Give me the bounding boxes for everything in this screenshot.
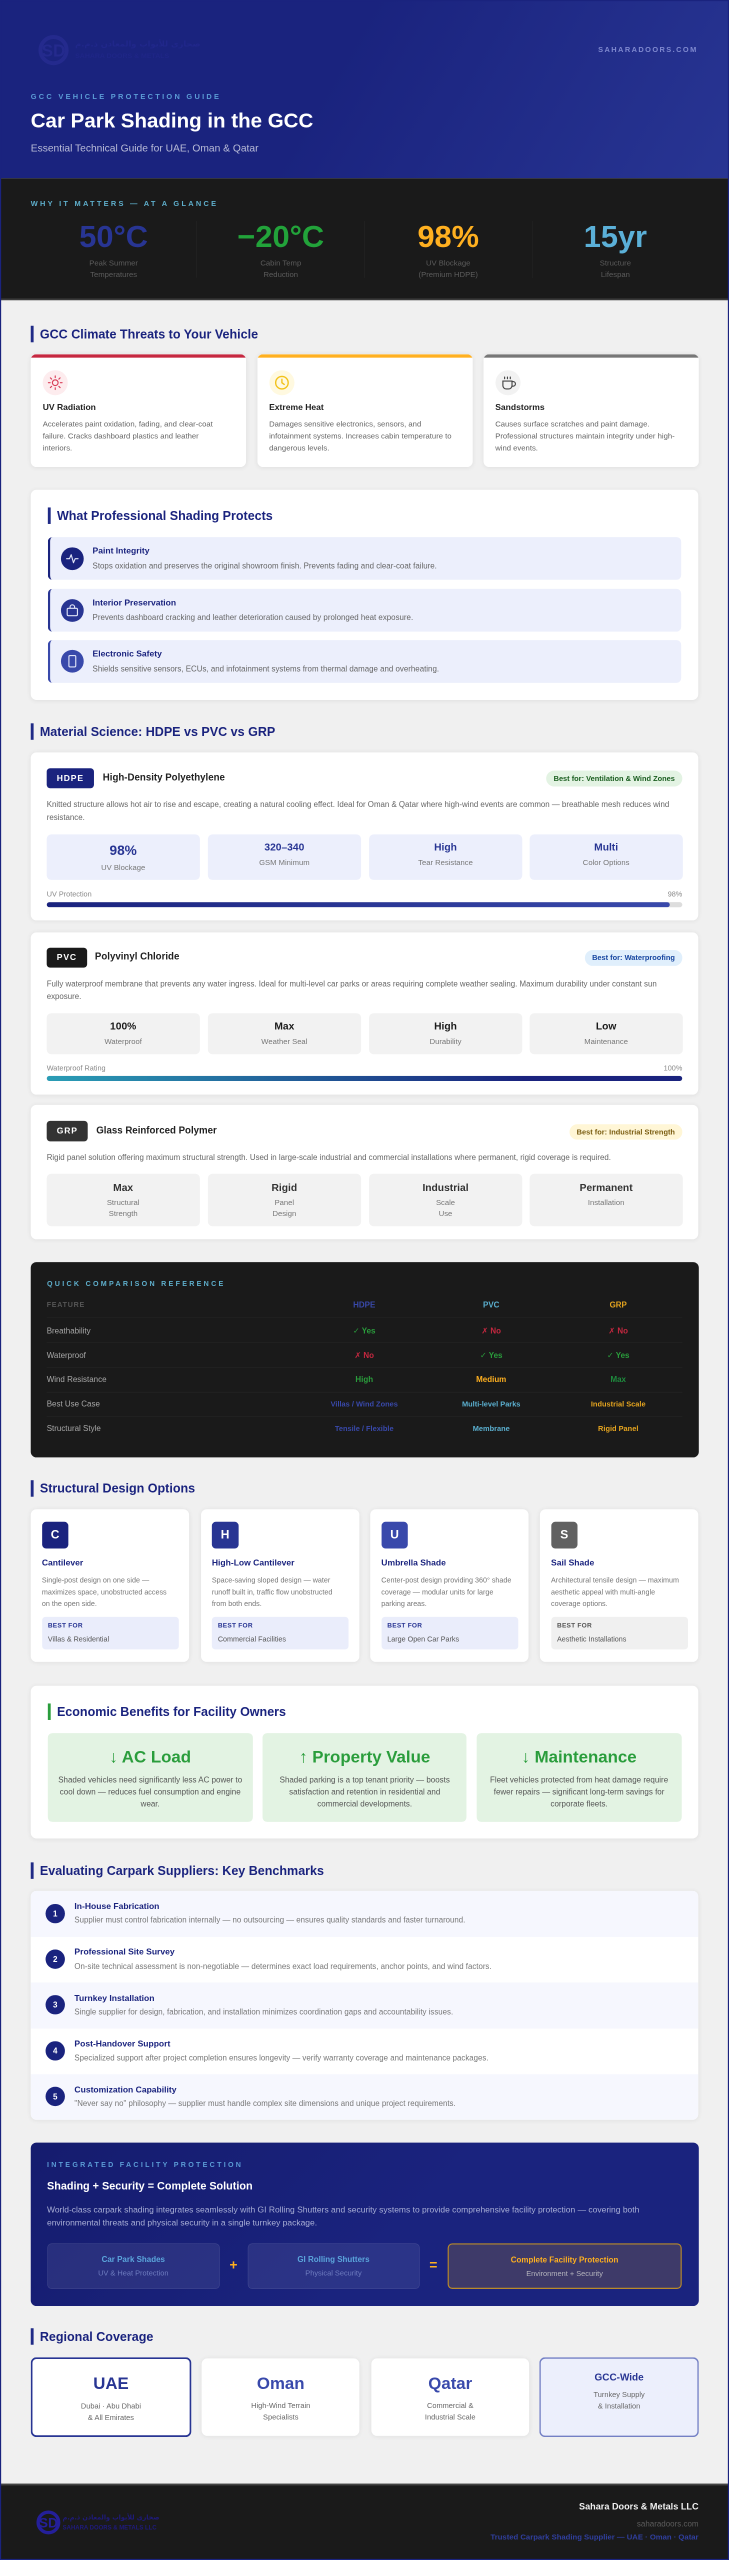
spec tile: scale — [369, 1174, 522, 1226]
structure card: umbrella shade: Center-post design providing 360° shade — [381, 1577, 511, 1585]
region card: Oman — [202, 2358, 360, 2436]
benefit: AC load — [48, 1733, 253, 1822]
structure card: umbrella shade: coverage — modular units for large — [381, 1588, 493, 1596]
badge: HDPE — [47, 768, 94, 788]
row: best use case — [47, 1392, 682, 1417]
spec tile: structural strength: Strength — [109, 1209, 138, 1218]
pill: best for — [569, 1124, 682, 1139]
spec tile: tear resistance: High — [434, 841, 457, 853]
item: electronic safety — [48, 640, 681, 683]
region card: UAE: UAE — [93, 2374, 129, 2393]
plus sign: + — [230, 2258, 237, 2273]
spec tile: weather seal: Max — [274, 1021, 294, 1032]
equation box: car park shades: UV & Heat Protection — [98, 2268, 168, 2277]
best for — [381, 1617, 518, 1649]
footer — [0, 2483, 729, 2560]
pill: best for: Best for: Ventilation & Wind Zones — [554, 774, 675, 782]
spec tile: UV blockage — [47, 834, 200, 880]
badge: PVC: PVC — [57, 953, 77, 962]
stat: UV blockage: 98% — [417, 220, 479, 254]
stat: peak temperature: Temperatures — [90, 270, 137, 279]
row: wind resistance: Wind Resistance — [47, 1375, 107, 1384]
spec tile: maintenance: Low — [596, 1021, 616, 1032]
spec tile: maintenance: Maintenance — [584, 1037, 628, 1046]
row: wind resistance: Medium — [476, 1375, 506, 1384]
region card: Qatar — [371, 2358, 529, 2436]
threat card: UV radiation: Accelerates paint oxidation, fading, and clear-coat — [43, 420, 213, 428]
material card: HDPE: High-Density Polyethylene — [103, 772, 225, 783]
structure card: high-low cantilever — [201, 1509, 359, 1662]
row: waterproof: Waterproof — [47, 1351, 86, 1360]
benefit: property value: satisfaction and retention in residential and — [289, 1787, 440, 1796]
icon: clock — [269, 370, 294, 395]
benefit: maintenance: ↓ Maintenance — [521, 1748, 637, 1767]
logo: Sahara Doors footer — [36, 2510, 160, 2534]
structure card: umbrella shade: parking areas. — [381, 1600, 427, 1608]
logo: Sahara Doors footer: SAHARA DOORS & METALS LLC — [63, 2524, 157, 2531]
benchmark 5: "Never say no" philosophy — supplier must handle complex site dimensions and unique project requirements. — [74, 2099, 456, 2108]
panel heading: Economic Benefits for Facility Owners — [57, 1704, 286, 1719]
region card: GCC-wide — [540, 2358, 699, 2437]
spec tile: scale: Use — [439, 1209, 452, 1218]
structure card: sail shade: coverage options. — [551, 1600, 608, 1608]
panel description — [47, 2206, 639, 2228]
structure card: umbrella shade: Umbrella Shade — [381, 1558, 446, 1568]
equation box: car park shades — [47, 2243, 220, 2289]
website label: SAHARADOORS.COM — [598, 45, 698, 54]
benchmark 2: On-site technical assessment is non-negotiable — determines exact load requirements, anchor points, and wind factors. — [74, 1962, 492, 1970]
row: best use case: Industrial Scale — [591, 1400, 646, 1409]
table header row: GRP — [610, 1300, 627, 1310]
best for: BEST FOR — [557, 1623, 592, 1629]
row: breathability: ✗ No — [608, 1326, 628, 1335]
row: structural style — [47, 1424, 638, 1433]
spec tile: panel design: Rigid — [272, 1182, 297, 1193]
spec tile: weather seal: Weather Seal — [261, 1037, 307, 1046]
row: best use case: Villas / Wind Zones — [331, 1400, 398, 1409]
equation box: complete protection: Complete Facility Protection — [511, 2255, 618, 2264]
logo: Sahara Doors faint: SAHARA DOORS & METALS — [75, 53, 170, 60]
region card: Oman: Specialists — [263, 2412, 298, 2421]
benchmark 1 — [31, 1891, 698, 1937]
stat: peak temperature: 50°C — [79, 220, 148, 254]
badge: GRP: GRP — [57, 1126, 78, 1136]
panel description: environmental threats and physical security in a single turnkey package. — [47, 2219, 317, 2228]
threat card: extreme heat: dangerous levels. — [269, 444, 329, 452]
structure card: cantilever: Single-post design on one side — — [42, 1577, 149, 1585]
spec tile: maintenance — [530, 1013, 683, 1054]
structure card: sail shade: aesthetic appeal with multi-angle — [551, 1588, 655, 1596]
equation box: car park shades: Car Park Shades — [102, 2255, 165, 2264]
threat card: sandstorms — [483, 354, 699, 467]
row: best use case: Best Use Case — [47, 1400, 100, 1409]
heading: regional coverage: Regional Coverage — [40, 2329, 153, 2344]
best for: Large Open Car Parks — [387, 1635, 459, 1643]
benchmark 1: Supplier must control fabrication internally — no outsourcing — ensures quality standards and faster turnaround. — [74, 1916, 465, 1925]
benchmark 2 — [31, 1937, 698, 1983]
region card: Qatar: Commercial & — [427, 2401, 473, 2410]
pill: best for — [546, 770, 682, 786]
material card: HDPE — [31, 752, 698, 920]
stat: peak temperature: Peak Summer — [89, 259, 138, 267]
stat: cabin temperature: Reduction — [263, 270, 298, 279]
region card: UAE: & All Emirates — [88, 2413, 134, 2421]
stat: UV blockage: (Premium HDPE) — [419, 270, 478, 279]
spec tile: durability — [369, 1013, 522, 1054]
benefit: AC load: Shaded vehicles need significantly less AC power to — [58, 1775, 242, 1784]
icon: activity — [61, 547, 83, 570]
item: paint integrity — [48, 537, 681, 580]
benefit: AC load: cool down — reduces fuel consumption and engine — [60, 1787, 241, 1796]
logo: Sahara Doors footer: صحارى للأبواب والمعادن ذ.م.م — [63, 2512, 160, 2521]
company name: Sahara Doors & Metals LLC — [579, 2502, 699, 2511]
heading: material science: Material Science: HDPE vs PVC vs GRP — [40, 724, 275, 739]
structure card: cantilever: maximizes space, unobstructed access — [42, 1588, 167, 1596]
stat: peak temperature — [79, 220, 148, 279]
table header row — [47, 1293, 682, 1318]
region card: UAE — [31, 2358, 191, 2437]
item: interior preservation: Interior Preservation — [93, 598, 176, 608]
badge: HDPE: HDPE — [57, 773, 84, 783]
item: interior preservation: Prevents dashboard cracking and leather deterioration caused by prolonged heat exposure. — [93, 613, 413, 622]
item: paint integrity: Paint Integrity — [93, 546, 150, 556]
heading: supplier benchmarks: Evaluating Carpark Suppliers: Key Benchmarks — [40, 1863, 324, 1878]
stat: cabin temperature: −20°C — [237, 220, 324, 254]
threat card: extreme heat: Extreme Heat — [269, 403, 324, 412]
spec tile: colours: Color Options — [583, 858, 629, 867]
badge: S: S — [560, 1528, 568, 1541]
stat: lifespan: Structure — [600, 259, 631, 267]
benefit: AC load: wear. — [141, 1799, 160, 1808]
spec tile: scale: Industrial — [422, 1182, 469, 1193]
best for: Villas & Residential — [48, 1635, 109, 1643]
material card: GRP — [31, 1105, 698, 1239]
subtitle: Essential Technical Guide for UAE, Oman & Qatar — [31, 142, 258, 154]
structure card: high-low cantilever: Space-saving sloped design — water — [212, 1577, 330, 1585]
stats band — [0, 178, 729, 300]
panel heading: What Professional Shading Protects — [57, 508, 273, 523]
spec tile: panel design: Design — [272, 1209, 296, 1218]
equation box: complete protection: Environment + Security — [526, 2269, 603, 2278]
spec tile: weather seal — [208, 1013, 361, 1054]
row: structural style: Tensile / Flexible — [335, 1424, 394, 1433]
benchmark 1: In-House Fabrication — [74, 1902, 159, 1911]
region card: Oman: High-Wind Terrain — [251, 2401, 310, 2410]
row: waterproof: ✗ No — [354, 1351, 374, 1360]
spec tile: installation: Permanent — [580, 1182, 633, 1193]
panel: supplier benchmarks — [31, 1891, 698, 2120]
spec tile: panel design: Panel — [275, 1198, 294, 1207]
benchmark 4 — [31, 2028, 698, 2074]
material card: HDPE: 98% — [668, 890, 682, 898]
threat card: sandstorms: Professional structures maintain integrity under high- — [495, 432, 675, 440]
row: wind resistance: High — [355, 1375, 373, 1384]
badge: GRP — [47, 1121, 88, 1141]
threat card: UV radiation — [31, 354, 246, 467]
region card: UAE: Dubai · Abu Dhabi — [81, 2402, 141, 2410]
benefit: AC load: ↓ AC Load — [109, 1748, 191, 1767]
row: waterproof — [47, 1343, 682, 1368]
material card: HDPE: resistance. — [47, 812, 85, 822]
threat card: sandstorms: wind events. — [495, 444, 538, 452]
structure card: umbrella shade — [370, 1509, 529, 1662]
benchmark 5: 5 — [53, 2092, 57, 2101]
structure card: high-low cantilever: runoff built in, traffic flow unobstructed — [212, 1588, 332, 1596]
spec tile: GSM: GSM Minimum — [259, 858, 310, 867]
spec tile: colours: Multi — [594, 841, 618, 853]
panel: comparison table — [31, 1262, 699, 1457]
badge: U: U — [390, 1528, 399, 1541]
structure card: cantilever: on the open side. — [42, 1600, 97, 1608]
badge: H — [212, 1522, 238, 1549]
benchmark 2: Professional Site Survey — [74, 1947, 175, 1957]
item: paint integrity: Stops oxidation and preserves the original showroom finish. Prevents fading and clear-coat failure. — [93, 561, 437, 570]
stat: cabin temperature: Cabin Temp — [260, 259, 301, 267]
badge: S — [551, 1522, 578, 1549]
best for — [212, 1617, 349, 1649]
spec tile: structural strength — [47, 1174, 200, 1226]
benchmark 3: Single supplier for design, fabrication, and installation minimizes coordination gaps and accountability issues. — [74, 2008, 453, 2016]
region card: GCC-wide: Turnkey Supply — [594, 2390, 645, 2399]
best for: Commercial Facilities — [218, 1635, 286, 1643]
badge: PVC — [47, 947, 87, 968]
benefit: property value: Shaded parking is a top tenant priority — boosts — [280, 1775, 450, 1784]
structure card: sail shade: Architectural tensile design — maximum — [551, 1577, 679, 1585]
benefit: maintenance: corporate fleets. — [550, 1799, 608, 1808]
material card: PVC: exposure. — [47, 992, 81, 1001]
spec tile: installation — [530, 1174, 683, 1226]
panel title: Shading + Security = Complete Solution — [47, 2180, 253, 2192]
threat card: UV radiation: interiors. — [43, 444, 72, 452]
spec tile: installation: Installation — [588, 1198, 624, 1207]
badge: C — [42, 1522, 68, 1549]
structure card: high-low cantilever: from both ends. — [212, 1600, 262, 1608]
material card: PVC: Polyvinyl Chloride — [95, 951, 179, 962]
threat card: sandstorms: Sandstorms — [495, 403, 545, 412]
table header row: PVC — [483, 1300, 499, 1310]
equation box: rolling shutters — [247, 2243, 419, 2289]
progress bar: UV protection — [47, 902, 682, 907]
item: electronic safety: Shields sensitive sensors, ECUs, and infotainment systems from thermal damage and overheating. — [93, 664, 439, 673]
spec tile: scale: Scale — [436, 1198, 455, 1207]
item: interior preservation — [48, 589, 681, 632]
row: breathability: ✗ No — [481, 1326, 501, 1335]
equation box: complete protection — [447, 2243, 682, 2289]
best for: BEST FOR — [48, 1623, 83, 1629]
spec tile: GSM — [208, 834, 361, 880]
best for: BEST FOR — [218, 1623, 253, 1629]
row: wind resistance: Max — [610, 1375, 626, 1384]
spec tile: durability: Durability — [430, 1037, 461, 1046]
tagline: Trusted Carpark Shading Supplier — UAE · Oman · Qatar — [490, 2532, 699, 2541]
threat card: UV radiation: failure. Cracks dashboard plastics and leather — [43, 432, 199, 440]
benchmark 3 — [31, 1983, 698, 2028]
logo: Sahara Doors faint: SD — [42, 41, 65, 60]
region card: GCC-wide: GCC-Wide — [595, 2372, 644, 2383]
eyebrow: INTEGRATED FACILITY PROTECTION — [47, 2161, 243, 2169]
table heading: QUICK COMPARISON REFERENCE — [47, 1279, 226, 1287]
panel: what shading protects — [31, 490, 698, 700]
spec tile: waterproof: Waterproof — [104, 1037, 142, 1046]
row: breathability: ✓ Yes — [353, 1326, 375, 1335]
structure card: sail shade: Sail Shade — [551, 1558, 594, 1568]
icon: sun — [43, 370, 68, 395]
structure card: cantilever: Cantilever — [42, 1558, 83, 1568]
spec tile: structural strength: Max — [113, 1182, 133, 1193]
spec tile: tear resistance — [369, 834, 522, 880]
badge: U — [381, 1522, 408, 1549]
heading: structural options: Structural Design Options — [40, 1481, 195, 1495]
header banner — [0, 0, 729, 178]
logo: Sahara Doors footer: SD — [39, 2515, 58, 2530]
spec tile: structural strength: Structural — [107, 1198, 139, 1207]
benchmark 4: Specialized support after project completion ensures longevity — verify warranty coverage and maintenance packages. — [74, 2053, 488, 2062]
spec tile: colours — [530, 834, 683, 880]
badge: H: H — [221, 1528, 229, 1541]
item: electronic safety: Electronic Safety — [93, 649, 162, 659]
stat: lifespan: Lifespan — [601, 270, 630, 279]
threat card: UV radiation: UV Radiation — [43, 403, 96, 412]
benchmark 2: 2 — [53, 1955, 57, 1964]
region card: Qatar: Industrial Scale — [425, 2412, 476, 2421]
logo: Sahara Doors faint: صحارى للأبواب والمعادن ذ.م.م — [75, 39, 201, 49]
best for: BEST FOR — [387, 1623, 422, 1629]
material card: HDPE: Knitted structure allows hot air to rise and escape, creating a natural cooling effect. Ideal for Oman & Qatar where high-wind events are common — breathable mesh reduces wind — [47, 800, 669, 809]
spec tile: durability: High — [434, 1021, 457, 1032]
benchmark 5: Customization Capability — [74, 2085, 176, 2094]
progress bar: waterproof rating — [47, 1076, 682, 1081]
pill: best for: Best for: Industrial Strength — [577, 1127, 675, 1136]
badge: C: C — [51, 1528, 59, 1541]
row: structural style: Rigid Panel — [598, 1424, 638, 1433]
logo: Sahara Doors faint — [38, 35, 201, 65]
threat card: extreme heat — [257, 354, 472, 467]
pill: best for: Best for: Waterproofing — [592, 953, 675, 962]
icon: bag — [61, 599, 83, 622]
stat: cabin temperature — [237, 220, 324, 279]
benefit: maintenance — [477, 1733, 681, 1822]
row: best use case: Multi-level Parks — [462, 1400, 520, 1409]
best for: Aesthetic Installations — [557, 1635, 626, 1643]
row: breathability: Breathability — [47, 1326, 91, 1335]
benchmark 3: Turnkey Installation — [74, 1993, 155, 2003]
icon: cup — [495, 370, 520, 395]
best for — [551, 1617, 688, 1649]
row: wind resistance — [47, 1368, 682, 1392]
eyebrow: GCC VEHICLE PROTECTION GUIDE — [31, 92, 221, 101]
threat card: extreme heat: Damages sensitive electronics, sensors, and — [269, 420, 421, 428]
region card: Qatar: Qatar — [428, 2374, 472, 2393]
material card: PVC: Fully waterproof membrane that prevents any water ingress. Ideal for multi-level car parks or areas requiring complete weather sealing. Maximum durability under constant sun — [47, 979, 657, 988]
benefit: maintenance: fewer repairs — significant long-term savings for — [494, 1787, 664, 1796]
row: breathability — [47, 1318, 682, 1343]
stat: lifespan: 15yr — [584, 220, 647, 254]
stat: lifespan — [584, 220, 647, 279]
band heading: WHY IT MATTERS — AT A GLANCE — [31, 199, 218, 208]
spec tile: UV blockage: 98% — [109, 843, 137, 858]
spec tile: panel design — [208, 1174, 361, 1226]
stat: UV blockage — [417, 220, 479, 279]
equation box: rolling shutters: Physical Security — [305, 2268, 362, 2277]
spec tile: UV blockage: UV Blockage — [101, 863, 145, 872]
material card: GRP: Glass Reinforced Polymer — [96, 1125, 217, 1136]
structure card: high-low cantilever: High-Low Cantilever — [212, 1558, 294, 1568]
threat card: extreme heat: infotainment systems. Increases cabin temperature to — [269, 432, 452, 440]
website: saharadoors.com — [637, 2519, 699, 2528]
row: waterproof: ✓ Yes — [480, 1351, 502, 1360]
equals sign: = — [429, 2258, 437, 2273]
icon: device — [61, 650, 83, 673]
material card: PVC: Waterproof Rating — [47, 1064, 106, 1072]
benchmark 3: 3 — [53, 2000, 57, 2010]
benefit: property value: ↑ Property Value — [299, 1748, 430, 1767]
benefit: maintenance: Fleet vehicles protected from heat damage require — [490, 1775, 668, 1784]
benchmark 4: 4 — [53, 2046, 57, 2055]
heading: climate threats: GCC Climate Threats to Your Vehicle — [40, 327, 258, 341]
row: structural style: Membrane — [473, 1424, 510, 1433]
threat card: sandstorms: Causes surface scratches and paint damage. — [495, 420, 649, 428]
row: structural style: Structural Style — [47, 1424, 101, 1433]
equation box: rolling shutters: GI Rolling Shutters — [297, 2255, 370, 2264]
region card: Oman: Oman — [257, 2374, 305, 2393]
panel: economic benefits — [31, 1686, 698, 1839]
row: waterproof: ✓ Yes — [607, 1351, 629, 1360]
title: Car Park Shading in the GCC — [31, 109, 313, 132]
material card: HDPE: UV Protection — [47, 890, 92, 898]
pill: best for — [585, 950, 682, 966]
structure card: sail shade — [540, 1509, 698, 1662]
benchmark 4: Post-Handover Support — [74, 2039, 170, 2049]
benefit: property value — [263, 1733, 467, 1822]
spec tile: waterproof: 100% — [110, 1021, 136, 1032]
spec tile: waterproof — [47, 1013, 200, 1054]
material card: PVC — [31, 932, 698, 1094]
region card: GCC-wide: & Installation — [598, 2402, 640, 2410]
benchmark 1: 1 — [53, 1909, 57, 1918]
table header row: HDPE — [353, 1300, 375, 1310]
spec tile: tear resistance: Tear Resistance — [418, 858, 473, 867]
best for — [42, 1617, 179, 1649]
panel description: World-class carpark shading integrates seamlessly with GI Rolling Shutters and security systems to provide comprehensive facility protection — covering both — [47, 2206, 639, 2215]
benefit: property value: commercial developments. — [317, 1799, 412, 1808]
material card: PVC: 100% — [664, 1064, 682, 1072]
table header row: FEATURE — [47, 1301, 85, 1309]
panel: integrated protection — [31, 2143, 699, 2306]
spec tile: GSM: 320–340 — [264, 841, 304, 853]
structure card: cantilever — [31, 1509, 189, 1662]
benchmark 5 — [31, 2074, 698, 2120]
material card: GRP: Rigid panel solution offering maximum structural strength. Used in large-scale industrial and commercial installations where permanent, rigid coverage is required. — [47, 1153, 611, 1162]
stat: UV blockage: UV Blockage — [426, 259, 470, 267]
